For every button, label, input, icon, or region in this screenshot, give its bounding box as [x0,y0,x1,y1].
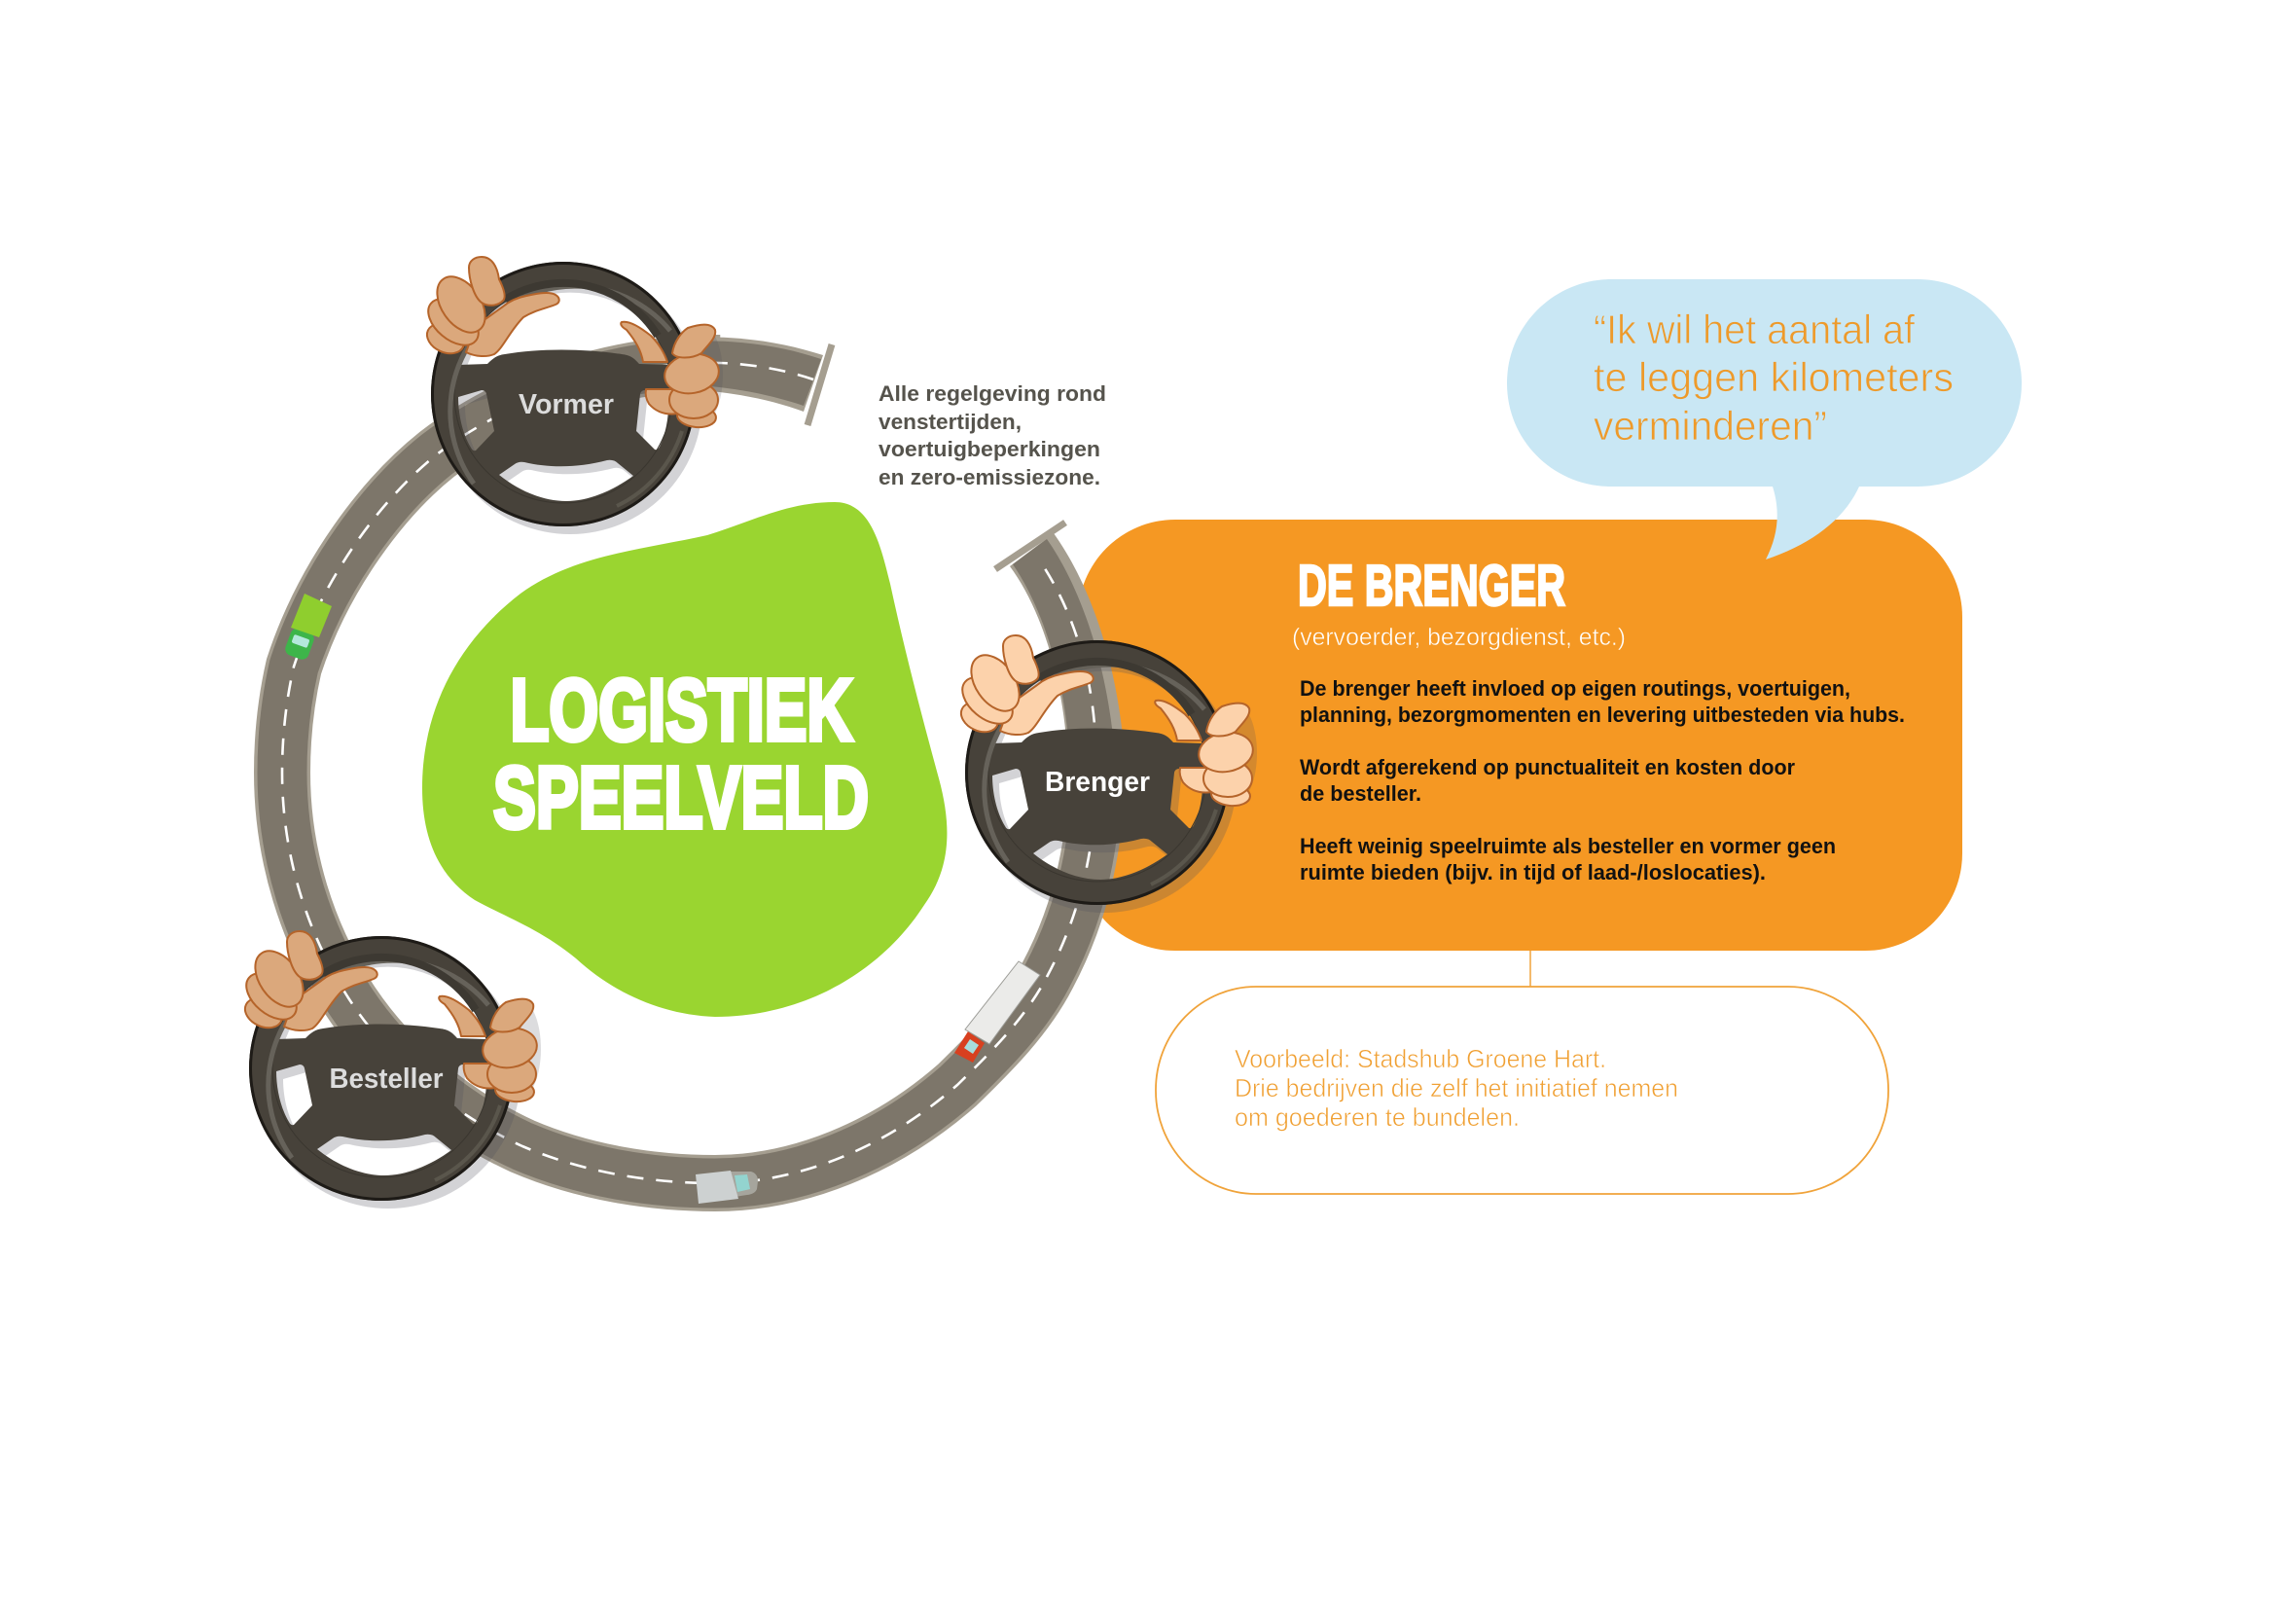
steering wheel: Besteller [237,931,541,1209]
title: Logistiek Speelveld: LOGISTIEK [510,662,852,759]
text: quote: te leggen kilometers [1594,354,1954,400]
text: quote [1594,307,1954,449]
callout: voorbeeld [1156,987,1888,1194]
text block: regelgeving: voertuigbeperkingen [879,437,1100,461]
speech bubble: quote [1507,279,2022,559]
road: winding road through the three steering wheels [282,337,1126,1183]
text block: description of De Brenger [1300,676,1905,884]
icon: white truck with red cab [954,961,1040,1063]
text: quote: “Ik wil het aantal af [1594,307,1915,352]
heading: De Brenger: DE BRENGER [1298,554,1565,618]
text: voorbeeld: Drie bedrijven die zelf het initiatief nemen [1235,1073,1678,1102]
connector line [1529,951,1531,987]
text block: description of De Brenger: planning, bezorgmomenten en levering uitbesteden via hubs. [1300,703,1905,727]
text block: description of De Brenger: Heeft weinig speelruimte als besteller en vormer geen [1300,834,1836,858]
blob: green background shape [422,502,947,1017]
panel: De Brenger orange panel [1078,520,1962,951]
text: voorbeeld: Voorbeeld: Stadshub Groene Hart. [1235,1044,1606,1073]
steering wheel: Brenger [953,635,1257,913]
text block: regelgeving: en zero-emissiezone. [879,465,1100,489]
text: voorbeeld [1235,1044,1678,1132]
steering wheel: Besteller: Besteller [329,1064,444,1095]
text block: regelgeving [879,381,1106,489]
text block: description of De Brenger: Wordt afgerekend op punctualiteit en kosten door [1300,755,1795,779]
steering wheel: Vormer: Vormer [519,389,614,420]
text: voorbeeld: om goederen te bundelen. [1235,1102,1520,1132]
title: Logistiek Speelveld: SPEELVELD [493,749,869,847]
text block: regelgeving: venstertijden, [879,410,1022,434]
text block: description of De Brenger: de besteller. [1300,781,1421,806]
text block: description of De Brenger: De brenger heeft invloed op eigen routings, voertuigen, [1300,676,1850,701]
text block: regelgeving: Alle regelgeving rond [879,381,1106,406]
text: quote: verminderen” [1594,403,1827,449]
subheading: vervoerder: (vervoerder, bezorgdienst, etc.) [1292,624,1626,651]
steering wheel: Brenger: Brenger [1045,767,1150,798]
title: Logistiek Speelveld [493,662,869,847]
text block: description of De Brenger: ruimte bieden (bijv. in tijd of laad-/loslocaties). [1300,860,1766,884]
icon: green truck on the road [283,594,332,662]
icon: grey truck [696,1171,758,1204]
steering wheel: Vormer [419,257,723,534]
